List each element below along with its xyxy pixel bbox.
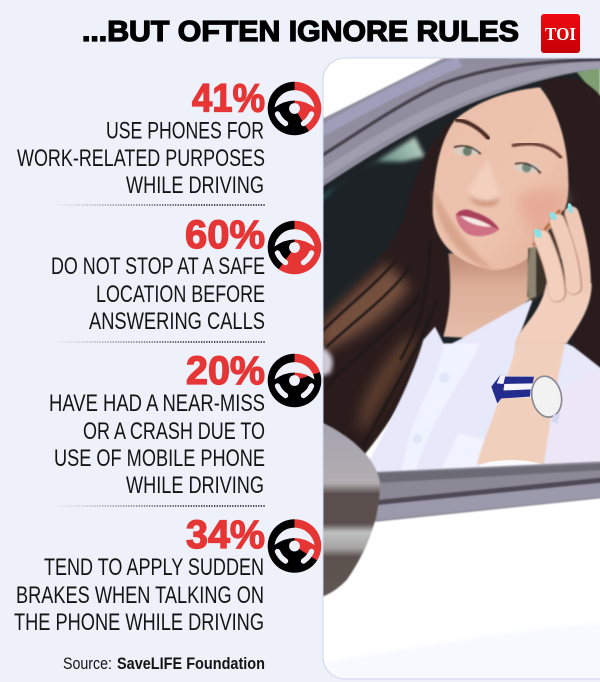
logo: TOI: TOI (545, 24, 576, 44)
door sill (373, 461, 600, 522)
stat: 60%: LOCATION BEFORE (96, 281, 265, 308)
stat: 60%: 60% (185, 213, 265, 257)
lips (456, 210, 499, 236)
car interior (324, 70, 590, 350)
divider (58, 204, 266, 206)
right hair (540, 78, 600, 380)
phone (527, 210, 573, 302)
outside foliage (576, 68, 600, 96)
photo: woman on phone in car (320, 57, 600, 682)
stat: 41%: WORK-RELATED PURPOSES (17, 145, 265, 172)
side mirror (320, 422, 380, 597)
nose (469, 164, 499, 200)
left hair (320, 117, 457, 456)
lower hair glow (360, 333, 420, 433)
stat: 41%: WHILE DRIVING (126, 172, 264, 199)
stat: 60%: DO NOT STOP AT A SAFE (51, 253, 265, 280)
stat: 20% (49, 349, 265, 499)
stat: 34% (14, 513, 265, 636)
stat: 34%: TEND TO APPLY SUDDEN (44, 554, 264, 581)
icon: steering wheel 34% (268, 519, 322, 573)
face (433, 87, 569, 270)
rear window (320, 137, 425, 203)
stat: 41%: USE PHONES FOR (106, 118, 264, 144)
title: ...BUT OFTEN IGNORE RULES (82, 16, 519, 48)
stat: 20%: 20% (186, 349, 265, 393)
eyebrows (457, 120, 488, 138)
divider (58, 341, 266, 343)
cuff (478, 460, 541, 467)
arm (477, 343, 565, 464)
shirt (360, 298, 600, 477)
stat: 34%: THE PHONE WHILE DRIVING (14, 609, 264, 636)
neck (443, 253, 537, 338)
stat: 20%: WHILE DRIVING (126, 472, 264, 499)
shirt glimpse through hair (320, 347, 333, 377)
photo border (323, 58, 600, 679)
stat: 20%: HAVE HAD A NEAR-MISS (49, 390, 265, 417)
icon: steering wheel 41% (268, 82, 322, 136)
door bottom shade (327, 623, 600, 682)
fingers (572, 213, 584, 287)
stat: 34%: BRAKES WHEN TALKING ON (16, 582, 264, 609)
icon: steering wheel 20% (268, 354, 322, 408)
icon: steering wheel 60% (268, 220, 322, 274)
stat: 34%: 34% (186, 513, 265, 557)
face shading (433, 190, 493, 270)
stat: 41%: 41% (192, 76, 265, 120)
source: Source: (63, 654, 112, 673)
nails (534, 228, 542, 238)
stat: 20%: OR A CRASH DUE TO (83, 418, 265, 445)
hand (515, 283, 592, 343)
stat: 60% (51, 213, 265, 335)
divider (58, 505, 266, 507)
source: SaveLIFE Foundation (117, 654, 265, 673)
top window frame (320, 57, 600, 188)
watch (491, 373, 565, 423)
brown hair glow (320, 263, 410, 353)
dark hair strands (320, 240, 437, 447)
stat: 20%: USE OF MOBILE PHONE (54, 445, 265, 472)
eyes (454, 146, 541, 173)
logo: TOI (541, 14, 580, 53)
stat: 60%: ANSWERING CALLS (89, 308, 265, 335)
stat: 41% (17, 76, 265, 199)
